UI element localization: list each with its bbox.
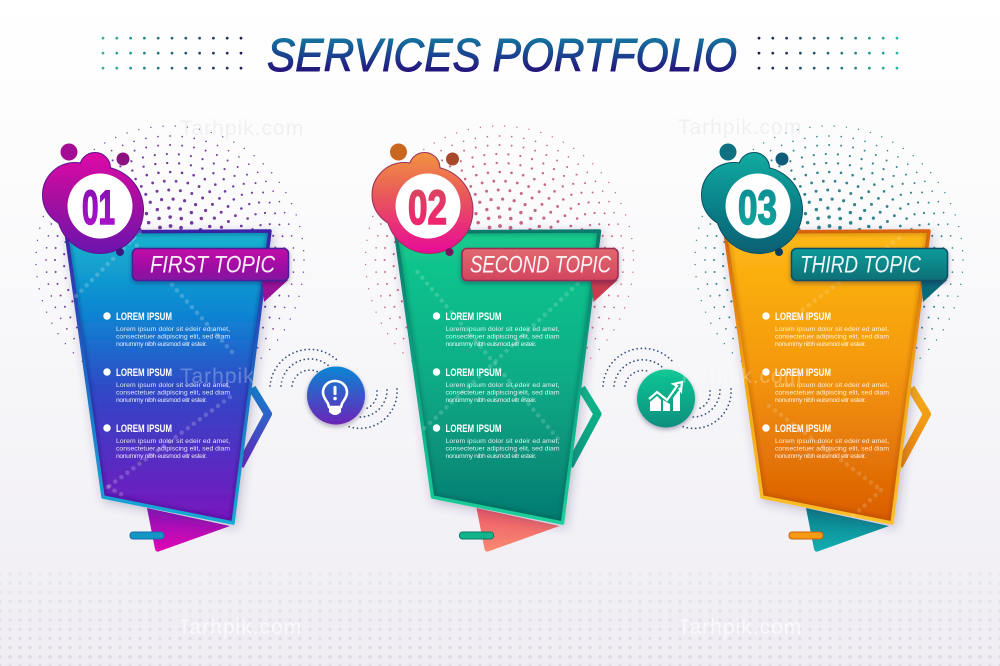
list items: LOREM IPSUM bbox=[116, 311, 172, 323]
list items: consectetuer adipiscing elit, sed diam bbox=[775, 390, 889, 396]
list items bbox=[103, 311, 230, 460]
list items: Lorem ipsum dolor sit edeir ed amet, bbox=[446, 438, 560, 445]
small bar bbox=[789, 532, 823, 539]
topic banner: FIRST TOPIC bbox=[150, 252, 275, 279]
ribbon tail bbox=[806, 508, 889, 552]
halftone dots bbox=[36, 126, 304, 394]
list items: consectetuer adipiscing elit, sed diam bbox=[446, 334, 560, 340]
dot grid: title left bbox=[103, 38, 243, 68]
list items: LOREM IPSUM bbox=[116, 423, 172, 435]
icon: growth chart with dotted arcs bbox=[603, 348, 731, 428]
inner edge shading bbox=[397, 232, 598, 521]
list items: consectetuer adipiscing elit, sed diam bbox=[116, 446, 230, 452]
panel: second topic bbox=[366, 126, 634, 552]
list items: nonummy nibh euismod eitr esteir. bbox=[775, 453, 866, 460]
watermark: Tarhpik.com bbox=[180, 365, 304, 388]
ribbon fold bbox=[921, 280, 947, 302]
list items: LOREM IPSUM bbox=[775, 367, 831, 379]
list items: nonummy nibh euismod eitr esteir. bbox=[446, 397, 537, 404]
inner edge shading bbox=[726, 232, 928, 521]
watermark: Tarhpik.com bbox=[178, 616, 302, 639]
list items: LOREM IPSUM bbox=[446, 367, 502, 379]
list items: Lorem ipsum dolor sit edeir ed amet, bbox=[775, 438, 889, 445]
number badge bbox=[43, 144, 143, 256]
watermark: Tarhpik.com bbox=[678, 616, 802, 639]
chevron bbox=[570, 388, 598, 466]
list items: consectetuer adipiscing elit, sed diam bbox=[775, 446, 889, 452]
list items: consectetuer adipiscing elit, sed diam bbox=[116, 390, 230, 396]
list items: nonummy nibh euismod eitr esteir. bbox=[116, 397, 207, 404]
list items: LOREM IPSUM bbox=[116, 367, 172, 379]
list items: consectetuer adipiscing elit, sed diam bbox=[775, 334, 889, 340]
small bar bbox=[130, 532, 164, 539]
card body bbox=[66, 231, 270, 523]
list items: LOREM IPSUM bbox=[775, 311, 831, 323]
watermark dots bbox=[76, 230, 232, 497]
topic banner bbox=[462, 248, 618, 280]
card body bbox=[725, 231, 929, 523]
ribbon fold bbox=[262, 280, 288, 302]
list items: Lorem ipsum dolor sit edeir ed amet, bbox=[446, 382, 560, 389]
chevron bbox=[899, 388, 927, 466]
list items: consectetuer adipiscing elit, sed diam bbox=[446, 390, 560, 396]
list items: nonummy nibh euismod eitr esteir. bbox=[116, 341, 207, 348]
list items: nonummy nibh euismod eitr esteir. bbox=[446, 453, 537, 460]
list items: Lorem ipsum dolor sit edeir ed amet, bbox=[116, 382, 230, 389]
watermark bbox=[178, 116, 802, 639]
topic banner bbox=[132, 248, 288, 280]
chevron bbox=[240, 388, 268, 466]
list items: nonummy nibh euismod eitr esteir. bbox=[775, 397, 866, 404]
list items: nonummy nibh euismod eitr esteir. bbox=[775, 341, 866, 348]
number badge: 01 bbox=[82, 182, 115, 235]
list items: Lorem ipsum dolor sit edeir ed amet, bbox=[116, 438, 230, 445]
small bar bbox=[460, 532, 494, 539]
number badge bbox=[702, 144, 802, 256]
dot grid: title right bbox=[759, 38, 899, 68]
number badge: 03 bbox=[738, 182, 777, 235]
watermark: Tarhpik.com bbox=[678, 116, 802, 139]
list items: nonummy nibh euismod eitr esteir. bbox=[446, 341, 537, 348]
number badge bbox=[372, 144, 472, 256]
inner edge shading bbox=[68, 232, 268, 521]
ribbon tail bbox=[476, 508, 560, 552]
list items: nonummy nibh euismod eitr esteir. bbox=[116, 453, 207, 460]
list items: Lorem ipsum dolor sit edeir ed amet, bbox=[446, 326, 560, 333]
card body bbox=[396, 231, 600, 523]
number badge: 02 bbox=[408, 182, 447, 235]
watermark: Tarhpik.com bbox=[678, 365, 802, 388]
list items: LOREM IPSUM bbox=[775, 423, 831, 435]
list items: Lorem ipsum dolor sit edeir ed amet, bbox=[775, 326, 889, 333]
list items: LOREM IPSUM bbox=[446, 311, 502, 323]
ribbon tail bbox=[147, 508, 230, 552]
list items: LOREM IPSUM bbox=[446, 423, 502, 435]
list items: Lorem ipsum dolor sit edeir ed amet, bbox=[775, 382, 889, 389]
panel: first topic bbox=[36, 126, 304, 552]
halftone dots bbox=[695, 126, 963, 394]
list items bbox=[433, 311, 560, 460]
panel: third topic bbox=[695, 126, 963, 552]
watermark dots bbox=[769, 238, 899, 520]
ribbon fold bbox=[592, 280, 618, 302]
list items: Lorem ipsum dolor sit edeir ed amet, bbox=[116, 326, 230, 333]
topic banner: SECOND TOPIC bbox=[470, 252, 611, 279]
icon: light bulb with dotted arcs bbox=[270, 349, 397, 428]
list items bbox=[762, 311, 889, 460]
watermark dots bbox=[406, 272, 578, 446]
topic banner: THIRD TOPIC bbox=[800, 252, 921, 279]
title: SERVICES PORTFOLIO bbox=[267, 29, 737, 81]
list items: consectetuer adipiscing elit, sed diam bbox=[116, 334, 230, 340]
list items: consectetuer adipiscing elit, sed diam bbox=[446, 446, 560, 452]
watermark: Tarhpik.com bbox=[180, 117, 304, 140]
halftone dots bbox=[366, 126, 634, 394]
